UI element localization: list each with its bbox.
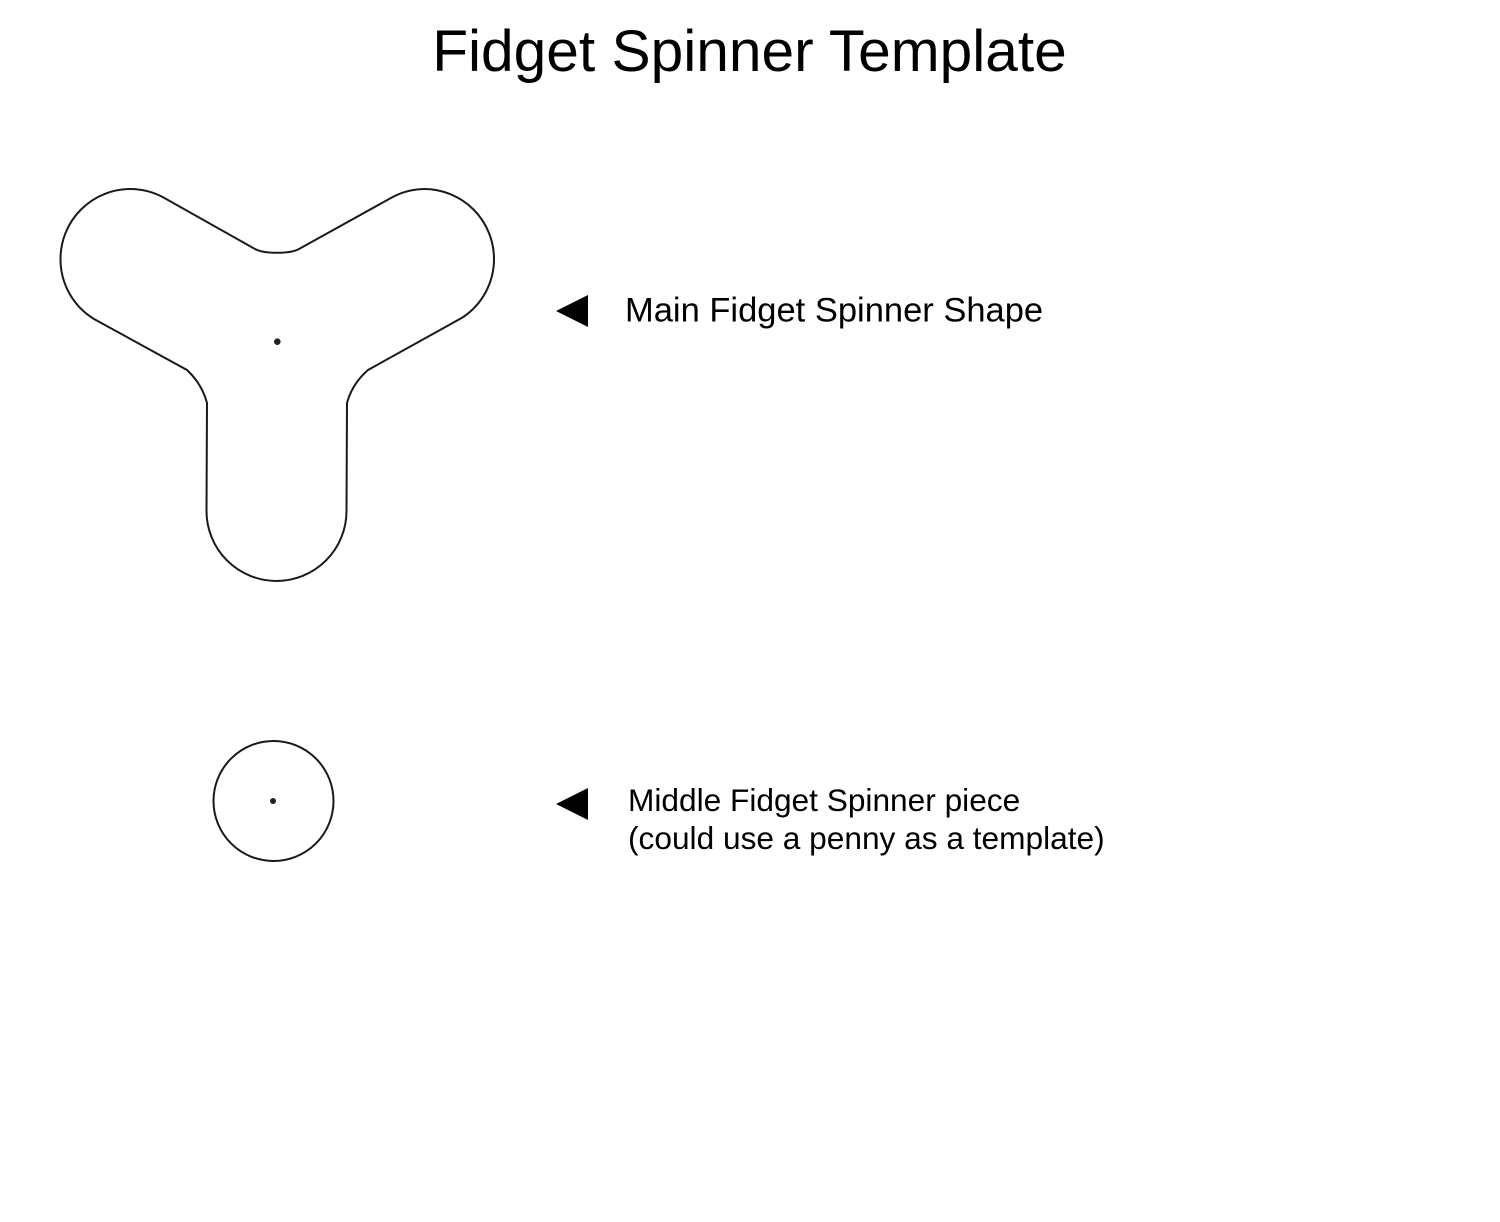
label: main shape: Main Fidget Spinner Shape [625,292,1043,330]
arrow: main shape [556,295,588,327]
middle fidget spinner piece [214,741,334,861]
label: middle piece: Middle Fidget Spinner piece [628,782,1020,818]
arrow: middle piece [556,788,588,820]
main fidget spinner shape [60,189,494,581]
label: middle piece: (could use a penny as a template) [628,820,1105,856]
title: Fidget Spinner Template [432,19,1067,84]
